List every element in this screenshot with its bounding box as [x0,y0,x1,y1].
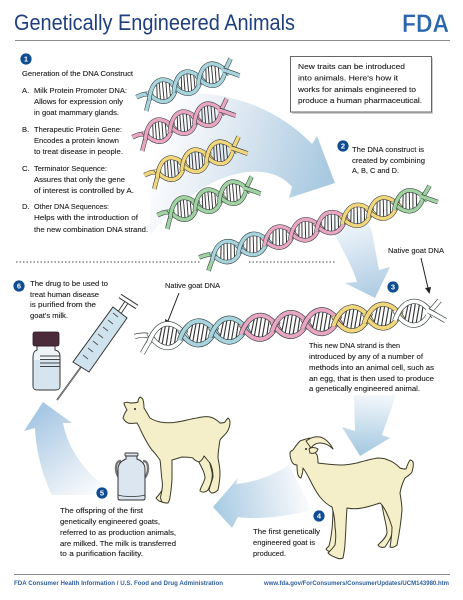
step 6 text: is purified from the [30,300,96,309]
badge 1: 1 [24,55,28,64]
callout box: New traits can be introduced [298,62,405,71]
step 4 text [253,527,320,558]
footer left: FDA Consumer Health Information / U.S. Food and Drug Administration [14,580,223,587]
step 6 text: goat's milk. [30,311,68,320]
arrow: strand to first goat [342,395,396,456]
step 1 text block: Therapeutic Protein Gene: [34,125,122,134]
arrow: construct to new strand [318,205,390,298]
step 1 text block: Helps with the introduction of [34,213,139,222]
step 5 text: referred to as production animals, [60,528,176,537]
step 4 text: engineered goat is [253,538,315,547]
illustration: offspring goat [123,397,230,503]
DNA strand D: green [154,174,262,231]
step 1 text block: Generation of the DNA Construct [22,69,134,78]
step 1 text block: Assures that only the gene [34,175,125,184]
step 1 text block: Milk Protein Promoter DNA: [34,86,127,95]
label: native goat DNA left [165,281,221,327]
step 3 text: a genetically engineered animal. [309,384,420,393]
horn [306,437,333,449]
title: Genetically Engineered Animals [14,10,295,35]
step 1 text block: Allows for expression only [34,97,123,106]
step 1 text block: of interest is controlled by A. [34,186,134,195]
callout box [290,56,433,114]
recombined DNA strand with native goat DNA [134,298,446,354]
callout box: works for animals engineered to [297,85,416,94]
badge 5: 5 [100,489,104,498]
badge 1 [20,53,32,65]
step 1 text block: in goat mammary glands. [34,108,119,117]
icon: syringe [57,296,137,400]
step 3 text: This new DNA strand is then [309,341,400,350]
arrow: DNA segments to construct [150,93,335,235]
step 6 text: treat human disease [30,290,99,299]
icon: vial [33,332,60,390]
step 1 text block: Terminator Sequence: [34,164,107,173]
badge 5 [96,487,108,499]
step 5 text: to a purification facility. [60,549,143,558]
step 5 text: are milked. The milk is transferred [60,539,176,548]
step 1 text block: Encodes a protein known [34,136,119,145]
step 1 text block: the new combination DNA strand. [34,225,148,234]
step 4 text: The first genetically [253,527,320,536]
step 2 text: created by combining [352,156,425,165]
step 1 text block: to treat disease in people. [34,147,123,156]
badge 3 [387,281,399,293]
step 3 text: methods into an animal cell, such as [309,363,434,372]
callout box: produce a human pharmaceutical. [298,96,422,105]
step 1 text block [20,53,148,234]
step 6 text: The drug to be used to [30,279,108,288]
label: native goat DNA right: Native goat DNA [388,246,445,255]
label: native goat DNA left: Native goat DNA [165,281,221,290]
combined DNA construct [197,183,439,272]
badge 4 [313,510,325,522]
arrow: offspring to purified drug [24,402,118,495]
badge 4: 4 [317,512,322,521]
arrow: first goat to offspring [213,465,312,528]
step 1 text block: Other DNA Sequences: [34,202,109,211]
badge 3: 3 [391,283,395,292]
step 6 text [13,279,108,320]
step 1 text block: B. [22,125,29,134]
DNA strand B: pink [129,96,237,153]
step 3 text: introduced by any of a number of [309,352,424,361]
label: native goat DNA right [388,246,445,294]
step 5 text: The offspring of the first [60,506,144,515]
illustration: first engineered goat [290,437,413,559]
step 4 text: produced. [253,549,286,558]
step 5 text: genetically engineered goats, [60,517,160,526]
step 1 text block: A. [22,86,29,95]
step 3 text: an egg, that is then used to produce [309,374,434,383]
callout box: into animals. Here's how it [298,74,399,82]
step 5 text [60,506,176,558]
icon: milk can [116,453,148,500]
step 2 text: The DNA construct is [352,145,424,154]
badge 2: 2 [341,142,345,151]
step 3 text [309,341,434,393]
footer right: www.fda.gov/ForConsumers/ConsumerUpdates/UCM143980.htm [263,580,449,587]
FDA logo: FDA [402,10,449,38]
badge 6: 6 [17,282,21,291]
DNA strand C: yellow [141,134,249,191]
step 2 text [337,140,425,175]
step 1 text block: D. [22,202,30,211]
DNA strand A: blue [133,56,241,113]
step 1 text block: C. [22,164,30,173]
step 2 text: A, B, C and D. [352,166,399,175]
